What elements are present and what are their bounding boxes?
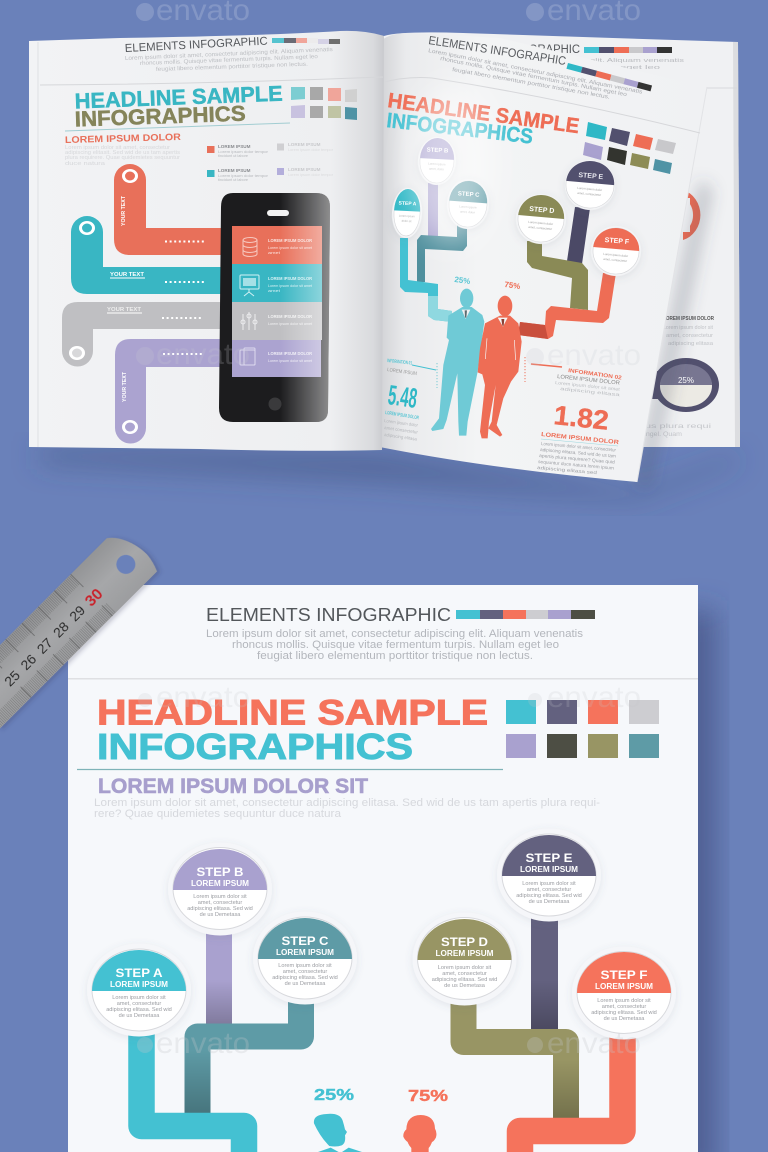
ribbon: red	[114, 164, 224, 255]
ruler numbers: 30	[82, 586, 107, 610]
back page intro text: elit. Aliquam venenatis	[590, 58, 684, 64]
step E circle: LOREM IPSUM	[520, 865, 578, 874]
step B: amet, dolor	[429, 167, 444, 171]
step B circle: LOREM IPSUM	[191, 879, 249, 888]
poster swatches	[506, 700, 659, 758]
phone band text: Lorem ipsum dolor sit amet	[268, 284, 313, 288]
poster intro text: feugiat libero elementum porttitor tristique non lectus.	[257, 650, 533, 662]
poster paragraph	[94, 797, 600, 820]
step C: Lorem ipsum	[459, 204, 477, 210]
page glare	[410, 85, 494, 245]
watermark row 4	[137, 1027, 641, 1060]
phone icon: presentation board	[240, 275, 259, 296]
left page color bar	[272, 38, 340, 44]
teal businessman silhouette	[431, 289, 484, 436]
ribbon: grey	[62, 302, 224, 366]
ribbon: red: YOUR TEXT	[121, 196, 127, 226]
book shadow	[40, 448, 738, 500]
front page headline: INFOGRAPHICS	[385, 109, 534, 149]
ribbon: teal	[71, 216, 224, 294]
25% label: 25%	[314, 1087, 354, 1104]
phone icon: sliders	[241, 312, 257, 330]
back page intro text	[590, 58, 684, 71]
step E circle: amet, consectetur	[527, 887, 571, 893]
smartphone	[219, 193, 330, 422]
step F	[589, 224, 643, 278]
step C: STEP C	[458, 191, 480, 199]
left page headline	[74, 82, 283, 131]
step F circle: amet, consectetur	[602, 1004, 646, 1010]
step C circle: STEP C	[282, 934, 329, 948]
panel: main poster sheet	[68, 585, 698, 1152]
step D circle: Lorem ipsum dolor sit	[438, 965, 492, 971]
step F: amet, consectetur	[603, 257, 627, 263]
back page navy ring 25%	[640, 358, 719, 412]
poster headline	[97, 694, 488, 767]
step B circle: adipiscing elitasa. Sed wid	[187, 906, 253, 912]
sheet shadow	[672, 610, 716, 1152]
step B circle: amet, consectetur	[198, 900, 242, 906]
step A circle: adipiscing elitasa. Sed wid	[106, 1007, 172, 1013]
back page caption	[642, 424, 711, 438]
left page title: ELEMENTS INFOGRAPHIC	[125, 36, 268, 55]
information 01 block: 5.48	[386, 379, 419, 414]
75% label: 75%	[408, 1088, 448, 1105]
step D: STEP D	[529, 206, 555, 215]
step B: STEP B	[427, 147, 449, 155]
step B	[417, 136, 457, 186]
ruler numbers: 25	[1, 667, 23, 689]
back page side text: adipiscing elitasa	[668, 341, 713, 347]
phone screen bands	[232, 226, 322, 377]
left page swatches	[291, 87, 357, 120]
watermark row 1	[136, 0, 641, 27]
1.82 big number: sequuntur duce natura lorem ipsum	[538, 459, 614, 471]
ruler numbers	[1, 585, 107, 691]
back page color bar	[584, 47, 672, 53]
information 02 block: Lorem ipsum dolor sit amet	[555, 380, 621, 392]
phone home button	[268, 398, 282, 410]
percent labels: 75%	[504, 280, 521, 291]
step A circle: de us Demetasa	[119, 1013, 160, 1019]
poster paragraph: rere? Quae quidemietes sequuntur duce natura	[94, 808, 342, 820]
information 01 block: LOREM IPSUM DOLOR	[385, 410, 419, 421]
step A: dolor sit	[402, 219, 412, 223]
left page paragraph: adipiscing elitasit. Sed wid de us tam apertis	[65, 150, 180, 156]
back page side text: Lorem ipsum dolor sit	[663, 325, 714, 331]
left page subheading: LOREM IPSUM DOLOR	[65, 132, 181, 146]
left page intro text	[125, 47, 333, 73]
percent labels: 25%	[454, 275, 471, 286]
step C circle: LOREM IPSUM	[276, 948, 334, 957]
poster headline: HEADLINE SAMPLE	[97, 694, 488, 732]
phone band text	[268, 238, 313, 363]
step E circle: adipiscing elitasa. Sed wid	[516, 893, 582, 899]
step D circle: adipiscing elitasa. Sed wid	[432, 977, 497, 983]
phone band text: Lorem ipsum dolor sit amet	[268, 322, 313, 326]
step E: Lorem ipsum dolor	[577, 186, 602, 192]
step F circle	[572, 946, 676, 1040]
step B circle	[168, 842, 272, 936]
back page side text: amet, consectetur	[666, 333, 713, 339]
ruler numbers: 28	[50, 618, 72, 641]
front page color bar	[566, 63, 652, 91]
step C circle	[253, 912, 357, 1004]
back page caption: angel. Quam	[642, 432, 682, 438]
watermark row 2: envato	[547, 339, 641, 372]
step B circle: de us Demetasa	[200, 912, 241, 918]
phone band text: Lorem ipsum dolor sit amet	[268, 359, 313, 363]
watermark row 3: envato	[547, 681, 641, 714]
panel: magazine front right page	[380, 33, 707, 482]
legend: Lorem ipsum dolor tempor	[218, 150, 269, 154]
front page headline: HEADLINE SAMPLE	[386, 89, 581, 138]
metal ruler	[0, 526, 161, 729]
poster color bar	[456, 610, 595, 619]
step D	[514, 192, 568, 246]
panel: magazine back right page	[380, 32, 740, 447]
left page intro text: feugiat libero elementum porttitor tristique non lectus.	[156, 62, 308, 73]
step D: amet, consectetur	[528, 225, 552, 231]
left page headline: INFOGRAPHICS	[74, 102, 246, 131]
front page intro text: feugiat libero elementum porttitor tristique non lectus.	[452, 67, 611, 101]
1.82 big number: Lorem ipsum dolor sit amet, consectetur	[541, 441, 616, 453]
phone band text: amet	[268, 289, 281, 293]
step B circle: Lorem ipsum dolor sit	[193, 894, 247, 900]
step E	[563, 158, 617, 212]
step D circle: de us Demetasa	[444, 983, 486, 989]
front page intro text: Lorem ipsum dolor sit amet, consectetur adipiscing elit. Aliquam venenatis	[428, 48, 643, 96]
step E circle: Lorem ipsum dolor sit	[522, 881, 576, 887]
step C circle: amet, consectetur	[283, 969, 327, 975]
ruler numbers: 29	[66, 602, 88, 624]
phone icon: database	[243, 238, 257, 256]
step A: Lorem ipsum	[399, 214, 416, 218]
front page title: ELEMENTS INFOGRAPHIC	[428, 33, 567, 68]
1.82 big number: adipiscing elitasa. Sed wid de us tam	[540, 447, 616, 459]
information 01 block: LOREM IPSUM	[387, 367, 417, 377]
step F circle: LOREM IPSUM	[595, 982, 653, 991]
phone band text: LOREM IPSUM DOLOR	[268, 276, 313, 281]
step D: Lorem ipsum dolor	[528, 220, 553, 226]
step B circle: STEP B	[196, 865, 244, 879]
step A circle: LOREM IPSUM	[110, 980, 168, 989]
left page paragraph	[65, 145, 180, 167]
information 01 block: INFORMATION 01	[387, 358, 412, 367]
step B: Lorem ipsum	[428, 162, 446, 166]
ruler numbers: 26	[17, 651, 40, 673]
back page navy ring 25%: 25%	[678, 376, 694, 385]
phone icon: clipboard	[240, 348, 255, 365]
1.82 big number	[537, 400, 620, 475]
left page paragraph: duce natura	[65, 161, 106, 167]
legend: LOREM IPSUM	[218, 144, 251, 149]
step E: STEP E	[578, 172, 604, 181]
legend: LOREM IPSUM	[218, 168, 251, 173]
ribbon: teal: YOUR TEXT	[110, 272, 144, 278]
front page edge shadow	[636, 180, 712, 486]
left page intro text: rhoncus mollis. Quisque vitae fermentum turpis. Nullam eget leo	[140, 54, 318, 67]
red person head	[403, 1115, 436, 1152]
step F circle: adipiscing elitasa. Sed wid	[591, 1010, 657, 1016]
front page intro text: rhoncus mollis. Quisque vitae fermentum turpis. Nullam eget leo	[440, 56, 627, 98]
phone band text: LOREM IPSUM DOLOR	[268, 238, 313, 243]
information 01 block: amet consectetur	[384, 425, 419, 435]
step E circle: de us Demetasa	[529, 899, 570, 905]
information 01 block	[384, 358, 437, 442]
red businessman silhouette	[478, 296, 522, 438]
step A: STEP A	[398, 201, 417, 207]
left ribbons	[142, 930, 301, 1152]
poster headline: INFOGRAPHICS	[97, 726, 413, 767]
information 02 block: LOREM IPSUM DOLOR	[557, 374, 620, 387]
information 02 block: INFORMATION 02	[568, 368, 622, 381]
back page side text	[663, 316, 714, 347]
poster title: ELEMENTS INFOGRAPHIC	[206, 605, 451, 625]
back page side text: LOREM IPSUM DOLOR	[663, 316, 714, 322]
step F: Lorem ipsum dolor	[603, 252, 628, 258]
step C: amet, dolor	[460, 209, 475, 214]
watermark row 2	[136, 338, 641, 372]
watermark row 3	[138, 681, 641, 714]
phone glare	[219, 193, 330, 422]
information 01 block: adipiscing elitasa	[384, 432, 418, 442]
phone band text: amet	[268, 251, 281, 255]
front page ribbons	[400, 183, 616, 339]
teal person head	[314, 1114, 362, 1152]
legend: Lorem ipsum dolor tempor	[288, 148, 334, 152]
right ribbons	[464, 910, 622, 1152]
back page red ring chart	[676, 190, 700, 240]
legend: tincidunt ut labore	[218, 154, 248, 158]
step E: amet, consectetur	[577, 191, 601, 197]
step D circle	[412, 912, 516, 1006]
percent labels	[454, 275, 521, 291]
watermark row 4: envato	[156, 1027, 250, 1060]
step C circle: de us Demetasa	[285, 981, 326, 987]
step C circle: adipiscing elitasa. Sed wid	[272, 975, 338, 981]
1.82 big number: 1.82	[552, 400, 610, 436]
poster intro text: rhoncus mollis. Quisque vitae fermentum turpis. Nullam eget leo	[232, 639, 559, 651]
phone band text: Lorem ipsum dolor sit amet	[268, 246, 313, 250]
step C	[445, 178, 491, 230]
left page headline: HEADLINE SAMPLE	[74, 82, 283, 113]
legend: LOREM IPSUM	[288, 142, 321, 147]
ribbon: grey: YOUR TEXT	[107, 307, 141, 313]
left page paragraph: Lorem ipsum dolor sit amet, consectetur	[65, 145, 170, 151]
information 02 block	[525, 357, 622, 397]
information 02 block: adipiscing elitasa	[560, 386, 621, 397]
watermark row 2: envato	[156, 338, 250, 371]
step A circle: amet, consectetur	[117, 1001, 161, 1007]
step E circle: STEP E	[526, 851, 572, 865]
back page intro text: eget leo	[620, 65, 660, 71]
watermark row 3: envato	[156, 681, 250, 714]
back page caption: us plura requi	[645, 424, 711, 430]
legend: Lorem ipsum dolor tempor	[218, 174, 269, 178]
front page intro text	[428, 48, 643, 101]
step D circle: LOREM IPSUM	[436, 949, 494, 958]
step F: STEP F	[604, 237, 630, 246]
panel: magazine left page	[29, 31, 384, 451]
step A	[391, 187, 423, 239]
ruler numbers: 27	[33, 634, 56, 657]
step F circle: Lorem ipsum dolor sit	[597, 998, 651, 1004]
ribbon: purple: YOUR TEXT	[122, 372, 128, 402]
legend	[207, 142, 334, 182]
step C circle: Lorem ipsum dolor sit	[278, 963, 332, 969]
legend: tincidunt ut labore	[218, 178, 248, 182]
back page title: OGRAPHIC	[520, 44, 580, 56]
left page intro text: Lorem ipsum dolor sit amet, consectetur adipiscing elit. Aliquam venenatis	[125, 47, 333, 62]
phone band text: LOREM IPSUM DOLOR	[268, 314, 313, 319]
phone band text: LOREM IPSUM DOLOR	[268, 351, 313, 356]
poster intro text	[206, 628, 584, 662]
step E circle	[497, 828, 601, 922]
left page paragraph: plura requirere. Quae quidemietes sequuntur	[65, 155, 180, 161]
step A circle: STEP A	[116, 966, 163, 980]
legend: Lorem ipsum dolor tempor	[288, 173, 334, 177]
step D circle: amet, consectetur	[442, 971, 487, 977]
phone speaker	[267, 210, 289, 216]
1.82 big number: adipiscing elitasa sed	[537, 465, 598, 475]
watermark row 4: envato	[547, 1027, 641, 1060]
poster subheading: LOREM IPSUM DOLOR SIT	[98, 775, 368, 798]
legend: LOREM IPSUM	[288, 167, 321, 172]
poster intro text: Lorem ipsum dolor sit amet, consectetur adipiscing elit. Aliquam venenatis	[206, 628, 584, 640]
1.82 big number: LOREM IPSUM DOLOR	[541, 432, 620, 446]
step A circle	[87, 944, 191, 1036]
1.82 big number: apertis plura requirere? Quae quid	[539, 453, 616, 465]
step D circle: STEP D	[441, 935, 488, 949]
poster paragraph: Lorem ipsum dolor sit amet, consectetur adipiscing elitasa. Sed wid de us tam apertis plura requi-	[94, 797, 600, 809]
step A circle: Lorem ipsum dolor sit	[112, 995, 166, 1001]
step F circle: STEP F	[600, 968, 648, 982]
front page swatches	[583, 122, 676, 174]
ribbon: purple	[115, 339, 224, 443]
information 01 block: Lorem ipsum dolor	[384, 418, 419, 428]
step F circle: de us Demetasa	[604, 1016, 645, 1022]
